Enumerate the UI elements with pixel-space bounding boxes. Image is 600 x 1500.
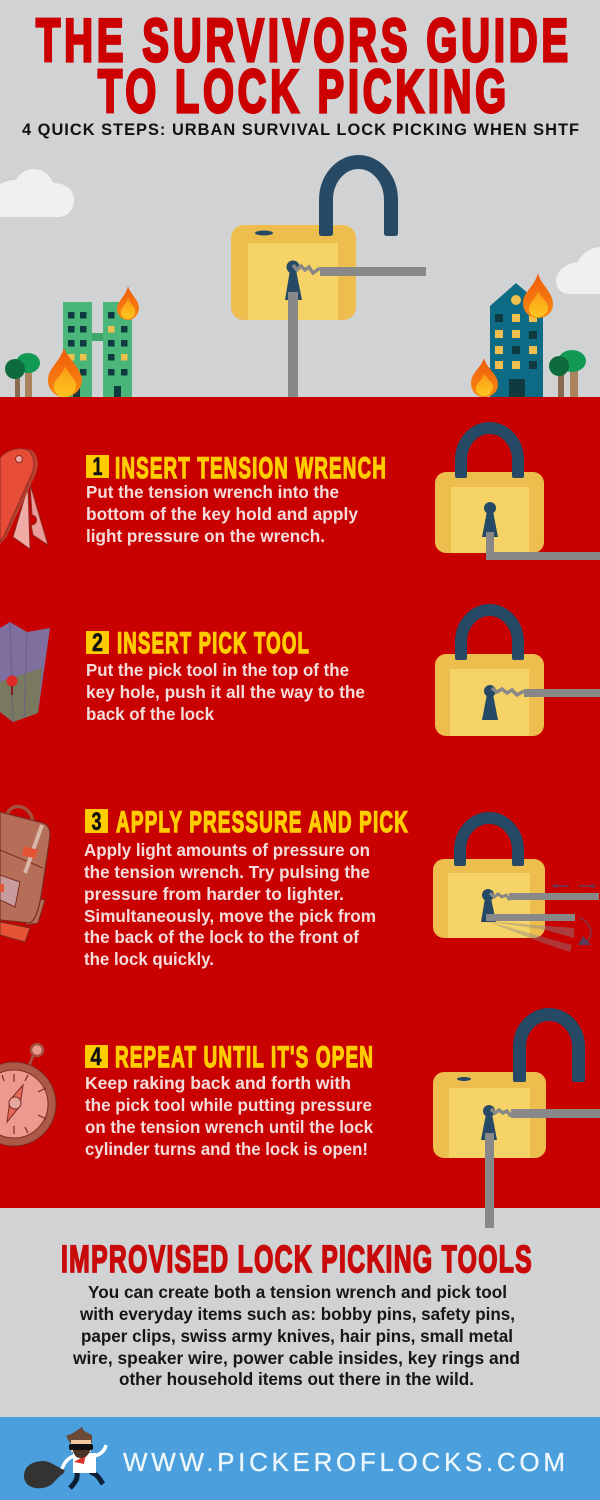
step 2 text: back of the lock bbox=[86, 704, 214, 724]
icon: flame on green building bbox=[117, 286, 139, 320]
step 1 heading: INSERT TENSION WRENCH bbox=[115, 452, 387, 485]
step 4 text bbox=[85, 1073, 373, 1159]
panel: red steps section bbox=[0, 397, 600, 1208]
step 4 heading: 4 bbox=[90, 1043, 102, 1071]
footer url: WWW.PICKEROFLOCKS.COM bbox=[123, 1447, 565, 1477]
step 3 text: the back of the lock to the front of bbox=[84, 927, 359, 947]
icon: left trees bbox=[5, 353, 40, 397]
step 2 heading: INSERT PICK TOOL bbox=[117, 627, 310, 660]
step 1 heading bbox=[86, 452, 387, 485]
illustration: green building bbox=[63, 302, 132, 397]
text block: improvised tools: with everyday items such as: bobby pins, safety pins, bbox=[79, 1304, 515, 1324]
icon: right trees bbox=[549, 350, 586, 397]
step 3 text bbox=[84, 840, 376, 969]
text block: improvised tools: paper clips, swiss army knives, hair pins, small metal bbox=[81, 1326, 513, 1346]
icon: right cloud bbox=[556, 247, 600, 294]
text block: improvised tools: other household items out there in the wild. bbox=[119, 1369, 474, 1389]
icon: flame left bbox=[48, 348, 82, 397]
step 4 text: the pick tool while putting pressure bbox=[85, 1095, 372, 1115]
step 1 text: bottom of the key hold and apply bbox=[86, 504, 358, 524]
step 2 padlock bbox=[435, 610, 600, 736]
icon: swiss army knife bbox=[0, 449, 48, 549]
step 3 text: pressure from harder to lighter. bbox=[84, 884, 344, 904]
step 4 open padlock bbox=[433, 1014, 600, 1228]
step 2 heading: 2 bbox=[92, 629, 103, 657]
step 1 text bbox=[86, 482, 358, 546]
illustration: hero open padlock bbox=[231, 162, 426, 397]
text block: improvised tools: wire, speaker wire, power cable insides, key rings and bbox=[72, 1348, 520, 1368]
step 3 text: the tension wrench. Try pulsing the bbox=[84, 862, 370, 882]
step 4 heading bbox=[85, 1041, 374, 1074]
icon: left cloud bbox=[0, 169, 74, 217]
icon: backpack bbox=[0, 807, 50, 942]
step 2 text bbox=[86, 660, 365, 724]
step 2 heading bbox=[86, 627, 310, 660]
step 1 padlock bbox=[435, 428, 600, 556]
step 3 text: the lock quickly. bbox=[84, 949, 214, 969]
step 1 text: light pressure on the wrench. bbox=[86, 526, 325, 546]
step 4 text: on the tension wrench until the lock bbox=[85, 1117, 373, 1137]
icon: thief with bag bbox=[24, 1427, 106, 1488]
step 3 padlock with motion arrows bbox=[433, 818, 599, 952]
step 1 heading: 1 bbox=[92, 453, 103, 481]
text block: improvised tools bbox=[72, 1282, 520, 1389]
icon: flame right ground bbox=[471, 358, 498, 397]
step 1 text: Put the tension wrench into the bbox=[86, 482, 339, 502]
illustration: blue building bbox=[490, 283, 543, 397]
step 4 heading: REPEAT UNTIL IT'S OPEN bbox=[115, 1041, 374, 1074]
icon: compass bbox=[0, 1044, 56, 1146]
step 2 text: Put the pick tool in the top of the bbox=[86, 660, 349, 680]
step 3 heading bbox=[85, 806, 409, 839]
step 3 text: Simultaneously, move the pick from bbox=[84, 906, 376, 926]
step 2 text: key hole, push it all the way to the bbox=[86, 682, 365, 702]
text block: improvised tools: You can create both a tension wrench and pick tool bbox=[88, 1282, 507, 1302]
icon: flame on blue building bbox=[523, 273, 553, 318]
step 3 heading: APPLY PRESSURE AND PICK bbox=[116, 806, 409, 839]
step 4 text: cylinder turns and the lock is open! bbox=[85, 1139, 368, 1159]
step 4 text: Keep raking back and forth with bbox=[85, 1073, 351, 1093]
title bbox=[36, 7, 572, 125]
panel: footer bbox=[0, 1417, 600, 1500]
step 3 heading: 3 bbox=[92, 808, 102, 836]
icon: map bbox=[0, 622, 50, 722]
subtitle: 4 QUICK STEPS: URBAN SURVIVAL LOCK PICKING WHEN SHTF bbox=[22, 121, 580, 139]
step 3 text: Apply light amounts of pressure on bbox=[84, 840, 370, 860]
